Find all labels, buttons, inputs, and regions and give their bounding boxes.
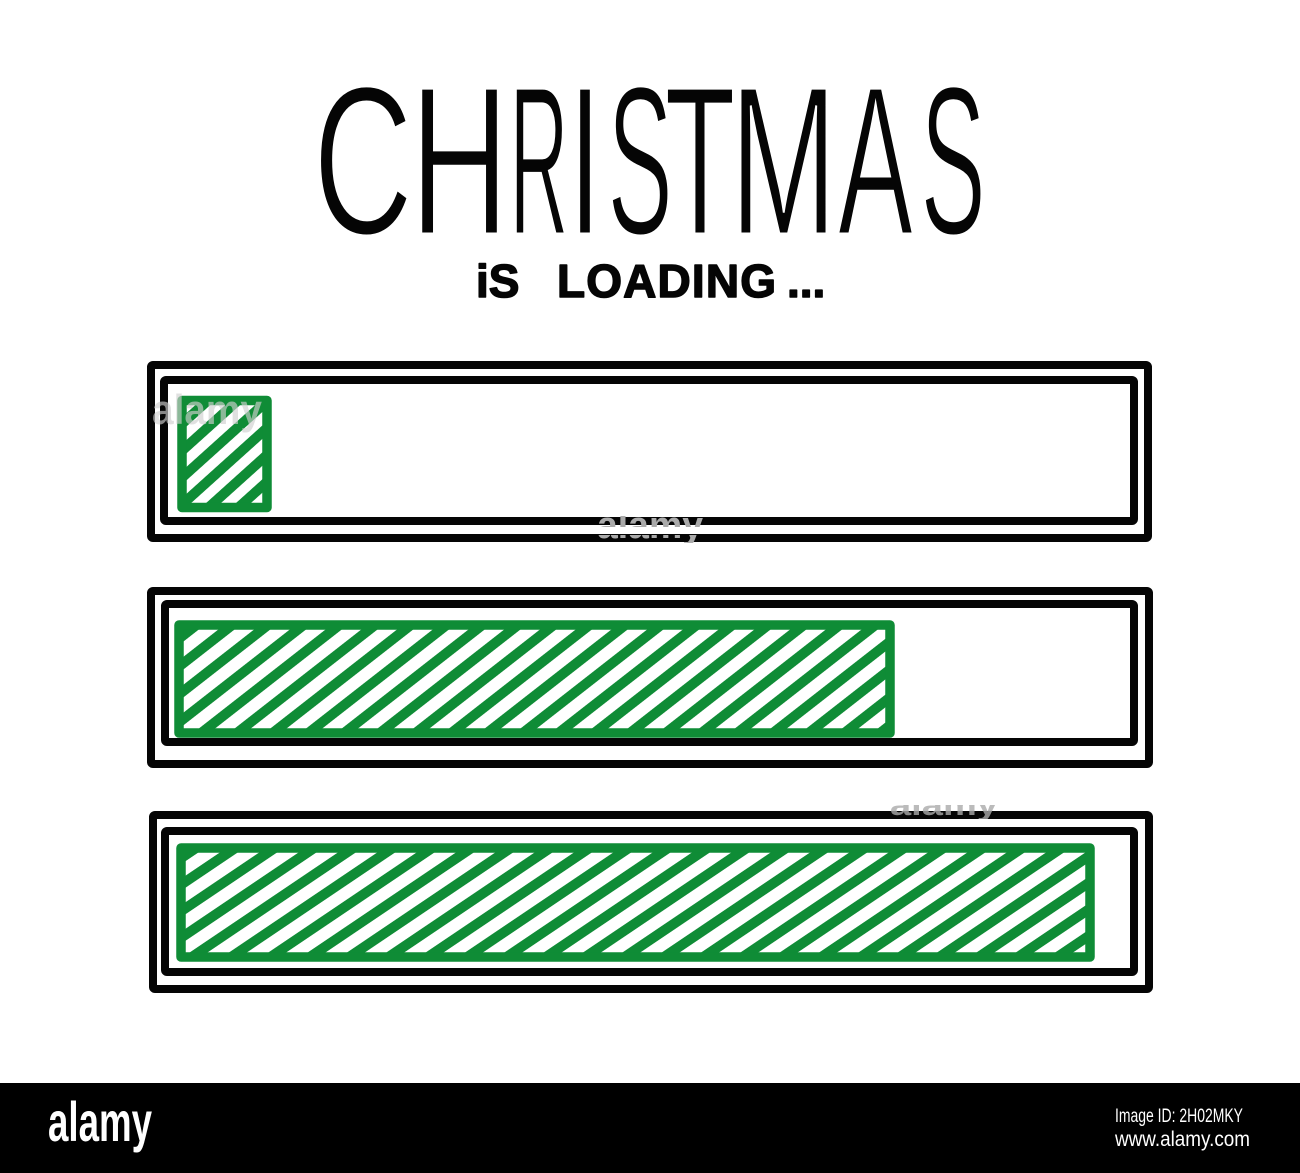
- title: M: [730, 43, 837, 280]
- title: I: [568, 43, 602, 280]
- watermark: alamy: [597, 505, 703, 547]
- title: A: [838, 43, 913, 280]
- watermark: alamy: [890, 789, 998, 822]
- website: www.alamy.com: [1114, 1128, 1250, 1151]
- title: R: [510, 43, 569, 280]
- subtitle: iS: [476, 255, 532, 307]
- watermark: [152, 386, 998, 822]
- title: H: [410, 43, 509, 280]
- subtitle: LOADING: [557, 255, 776, 307]
- footer logo: alamy: [48, 1090, 152, 1153]
- progress bar 2: [151, 591, 1149, 764]
- title: S: [608, 43, 673, 280]
- text: S: [921, 43, 986, 280]
- watermark: alamy: [152, 386, 263, 433]
- progress bar 1: [151, 365, 1148, 538]
- subtitle: ...: [787, 255, 825, 307]
- title: C: [313, 43, 413, 280]
- title: T: [664, 43, 735, 280]
- footer bar: [0, 1083, 1300, 1173]
- progress bar 3: [153, 815, 1149, 989]
- image id: Image ID: 2H02MKY: [1115, 1106, 1243, 1127]
